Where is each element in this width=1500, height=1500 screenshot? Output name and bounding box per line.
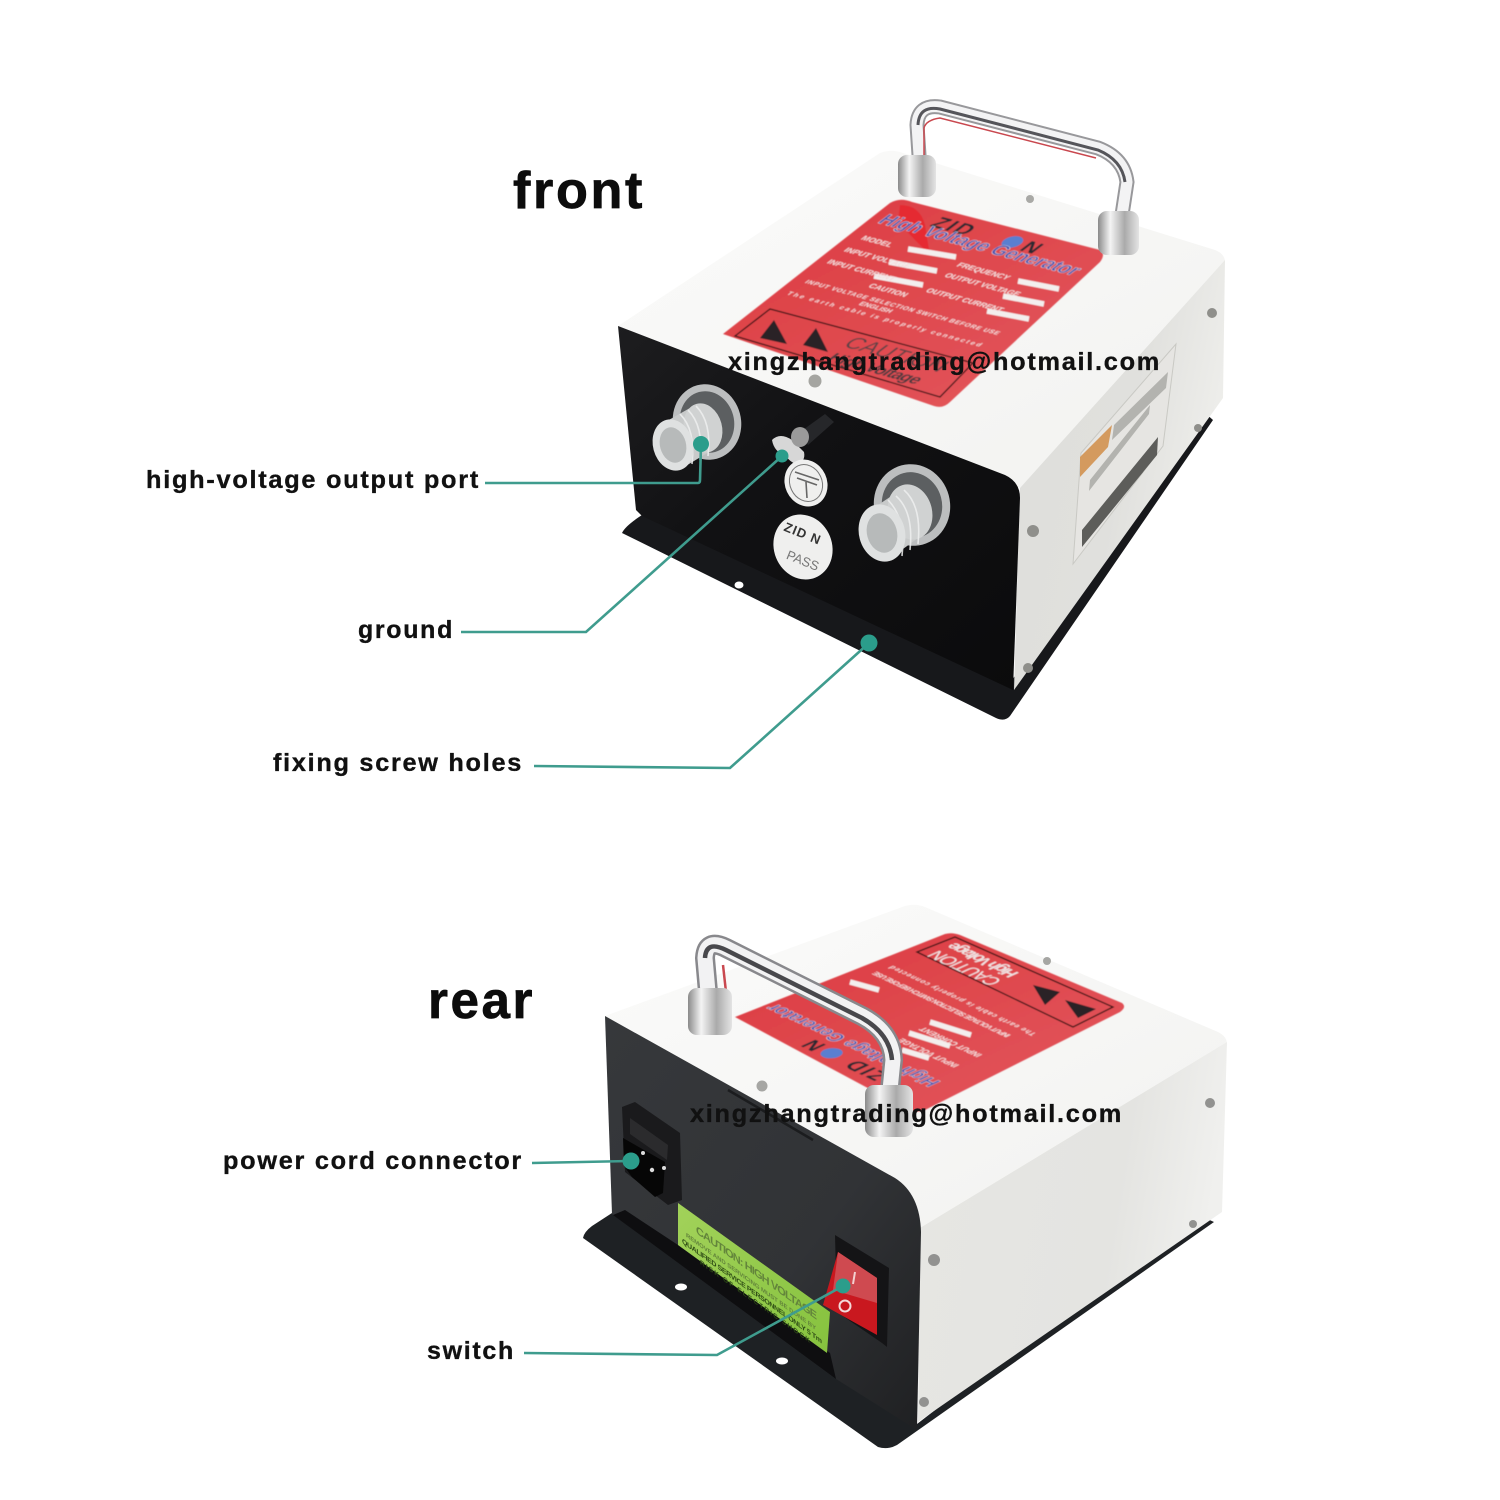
chrome handle [898, 107, 1139, 255]
red rating label [723, 200, 1103, 407]
top panel [605, 905, 1227, 1230]
pass sticker [764, 506, 842, 588]
callout: ground: ground [358, 616, 454, 644]
callout: ground [358, 450, 788, 644]
label printed text: N [1014, 238, 1049, 257]
black front face [618, 326, 1020, 690]
green caution label: CAUTION: HIGH VOLTAGE [696, 1223, 818, 1323]
screw holes [629, 1216, 788, 1364]
label printed text: CAUTION [866, 282, 911, 298]
label printed text: OUTPUT CURRENT [923, 287, 1007, 313]
label printed text: INPUT VOLTAGE [842, 246, 915, 270]
top screws [756, 957, 1051, 1092]
side panel [1014, 260, 1225, 690]
callout: fixing screw holes [273, 634, 878, 777]
label printed text: CAUTION [838, 333, 956, 375]
side screws [919, 1098, 1215, 1407]
label printed text: CAUTION [922, 948, 1007, 988]
ground sticker [777, 452, 835, 514]
label printed text [738, 931, 1103, 1099]
label printed text: High Voltage Generator [759, 1002, 945, 1089]
label printed text: INPUT CURRENT [825, 258, 900, 282]
label printed text: High Voltage [941, 941, 1024, 979]
green caution label: REMOVE AND SERVICING MUST BE DONE BY [686, 1232, 816, 1332]
callout: high-voltage output port: high-voltage output port [146, 466, 480, 494]
label printed text: OUTPUT VOLTAGE [942, 271, 1024, 298]
top screw [808, 374, 822, 388]
label printed text: INPUT CURRENT [916, 1026, 985, 1058]
green caution label: RISK OF ELECTRIC SHOCK [700, 1258, 811, 1345]
label printed text [727, 202, 1102, 390]
heading: rear: rear [428, 972, 535, 1030]
pass sticker: ZID N [782, 519, 824, 548]
callout: switch: switch [427, 1337, 515, 1365]
pass sticker: PASS [784, 547, 822, 574]
label glare [898, 205, 930, 255]
label printed text: ENGLISH [856, 300, 895, 314]
callout: power cord connector: power cord connector [223, 1147, 523, 1175]
caution box [735, 309, 973, 397]
product photo: front view [618, 107, 1225, 720]
screw hole [734, 582, 744, 588]
crease shadow [613, 1210, 836, 1379]
label printed text: High Voltage Generator [873, 211, 1087, 279]
callout: fixing screw holes: fixing screw holes [273, 749, 523, 777]
green caution label [678, 1203, 830, 1353]
label printed text: The earth cable is properly connected [785, 291, 983, 348]
label printed text: The earth cable is properly connected [886, 965, 1039, 1037]
email watermark front: xingzhangtrading@hotmail.com [728, 348, 1161, 376]
power cord connector [622, 1102, 682, 1205]
label printed text: ZID [837, 1057, 895, 1083]
label data fields [850, 982, 971, 1058]
callout: switch [427, 1278, 850, 1365]
panel slot [728, 1090, 813, 1140]
output port left [647, 376, 750, 475]
ground terminal [772, 414, 834, 464]
label printed text: ZID [925, 213, 984, 239]
barcode sticker [1073, 344, 1176, 564]
callout: high-voltage output port [146, 436, 709, 494]
label printed text: N [796, 1037, 832, 1054]
top panel [618, 151, 1225, 488]
label data fields [874, 249, 1059, 319]
warning triangles [760, 320, 828, 352]
mounting flange front [622, 412, 1213, 720]
warning triangles [1033, 985, 1096, 1018]
dark rear face [605, 1016, 921, 1430]
side screws [1023, 308, 1217, 673]
rocker switch [823, 1235, 889, 1347]
output port right [852, 456, 959, 567]
chrome handle [688, 945, 913, 1137]
label printed text: High Voltage [823, 350, 929, 387]
label printed text: INPUT VOLTAGE SELECTION SWITCH BEFORE USE [803, 280, 1002, 336]
label printed text: INPUT VOLTAGE [894, 1037, 962, 1069]
red rating label [735, 931, 1124, 1112]
small top screw [1026, 195, 1034, 203]
side panel [918, 1042, 1227, 1422]
heading: front: front [513, 162, 645, 220]
label printed text: INPUT VOLTAGE SELECTION SWITCH BEFORE USE [869, 971, 1013, 1038]
email watermark rear: xingzhangtrading@hotmail.com [690, 1100, 1123, 1128]
product photo: rear view [583, 905, 1227, 1448]
caution box [917, 937, 1113, 1027]
green caution label: QUALIFIED SERVICE PERSONNEL ONLY 5 Tm [682, 1237, 822, 1345]
mounting flange rear [583, 1212, 1214, 1448]
label printed text: FREQUENCY [954, 261, 1013, 281]
label printed text: MODEL [859, 234, 897, 249]
